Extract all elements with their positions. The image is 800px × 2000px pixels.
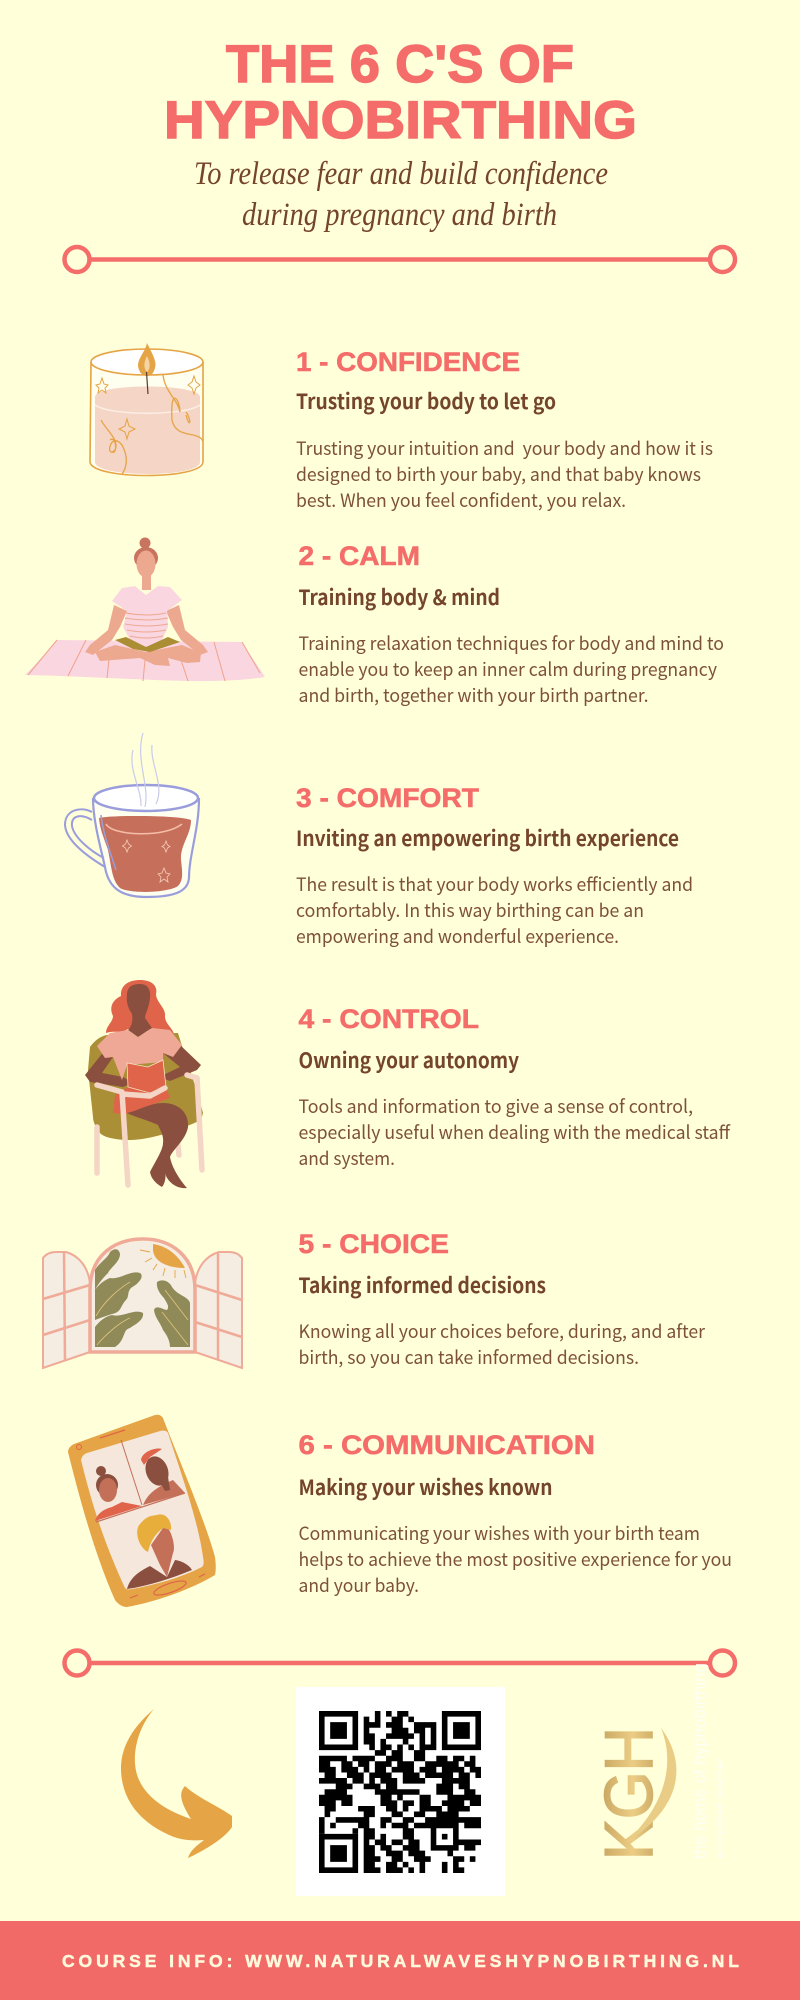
body text: calm: and birth, together with your birth partner. <box>298 682 648 708</box>
panel: 6 communication <box>68 1415 732 1607</box>
bottom divider <box>64 1650 735 1676</box>
heading: 3 comfort: 3 - COMFORT <box>296 783 480 813</box>
body text: comfort: empowering and wonderful experience. <box>296 923 619 949</box>
QR code <box>296 1687 505 1896</box>
body text: confidence: designed to birth your baby, and that baby knows <box>296 461 701 487</box>
icon: phone video call <box>68 1415 216 1607</box>
body text: confidence: best. When you feel confident, you relax. <box>296 487 626 513</box>
logo: KGH <box>591 1663 725 1860</box>
footer bar: COURSE INFO: WWW.NATURALWAVESHYPNOBIRTHING.NL <box>62 1951 739 1971</box>
body text: confidence: Trusting your intuition and your body and how it is <box>296 435 713 461</box>
body text: choice: birth, so you can take informed decisions. <box>298 1344 639 1370</box>
body text: control: Tools and information to give a sense of control, <box>298 1093 693 1119</box>
subtitle: during pregnancy and birth <box>242 197 557 233</box>
subheading: decisions: Taking informed decisions <box>298 1270 546 1300</box>
heading: 5 choice: 5 - CHOICE <box>298 1229 449 1259</box>
body text: communication: helps to achieve the most positive experience for you <box>298 1546 732 1572</box>
icon: woman reading in chair <box>85 980 203 1188</box>
heading: 2 calm: 2 - CALM <box>298 541 420 571</box>
body text: calm <box>298 630 724 708</box>
body text: comfort: comfortably. In this way birthing can be an <box>296 897 644 923</box>
subheading: trusting: Trusting your body to let go <box>296 386 556 416</box>
heading: 1 confidence: 1 - CONFIDENCE <box>296 347 520 377</box>
footer bar <box>0 1921 800 2000</box>
subheading: inviting: Inviting an empowering birth experience <box>296 823 679 853</box>
body text: comfort <box>296 871 693 949</box>
panel: 2 calm <box>25 538 724 708</box>
icon: open window <box>43 1239 242 1368</box>
body text: calm: enable you to keep an inner calm during pregnancy <box>298 656 717 682</box>
panel: 1 confidence <box>90 343 713 513</box>
heading: 6 communication: 6 - COMMUNICATION <box>298 1430 595 1460</box>
body text: confidence <box>296 435 713 513</box>
title: THE 6 C'S OF <box>226 35 574 94</box>
logo: KGH: accredited teacher <box>715 1758 725 1859</box>
panel: 4 control <box>85 980 731 1188</box>
subheading: training: Training body & mind <box>298 582 500 612</box>
panel: 5 choice <box>43 1229 706 1370</box>
body text: control <box>298 1093 731 1171</box>
body text: communication <box>298 1520 732 1598</box>
top divider <box>64 247 735 272</box>
subheading: autonomy: Owning your autonomy <box>298 1045 519 1075</box>
body text: calm: Training relaxation techniques for body and mind to <box>298 630 724 656</box>
heading: 4 control: 4 - CONTROL <box>298 1004 479 1034</box>
body text: control: especially useful when dealing with the medical staff <box>298 1119 731 1145</box>
body text: communication: Communicating your wishes with your birth team <box>298 1520 700 1546</box>
logo: KGH: the home of hypnobirthing <box>690 1663 709 1859</box>
subtitle <box>194 156 608 233</box>
arrow <box>121 1709 232 1858</box>
body text: choice: Knowing all your choices before, during, and after <box>298 1318 706 1344</box>
icon: meditating woman <box>25 538 265 681</box>
body text: comfort: The result is that your body works efficiently and <box>296 871 693 897</box>
body text: control: and system. <box>298 1145 395 1171</box>
title <box>164 35 637 150</box>
icon: tea cup <box>65 733 199 897</box>
panel: 3 comfort <box>65 733 693 949</box>
subheading: wishes: Making your wishes known <box>298 1472 552 1502</box>
body text: communication: and your baby. <box>298 1572 419 1598</box>
subtitle: To release fear and build confidence <box>194 156 608 192</box>
body text: choice <box>298 1318 706 1370</box>
logo: KGH: KGH <box>591 1727 667 1860</box>
icon: candle <box>90 343 203 476</box>
title: HYPNOBIRTHING <box>164 91 637 150</box>
